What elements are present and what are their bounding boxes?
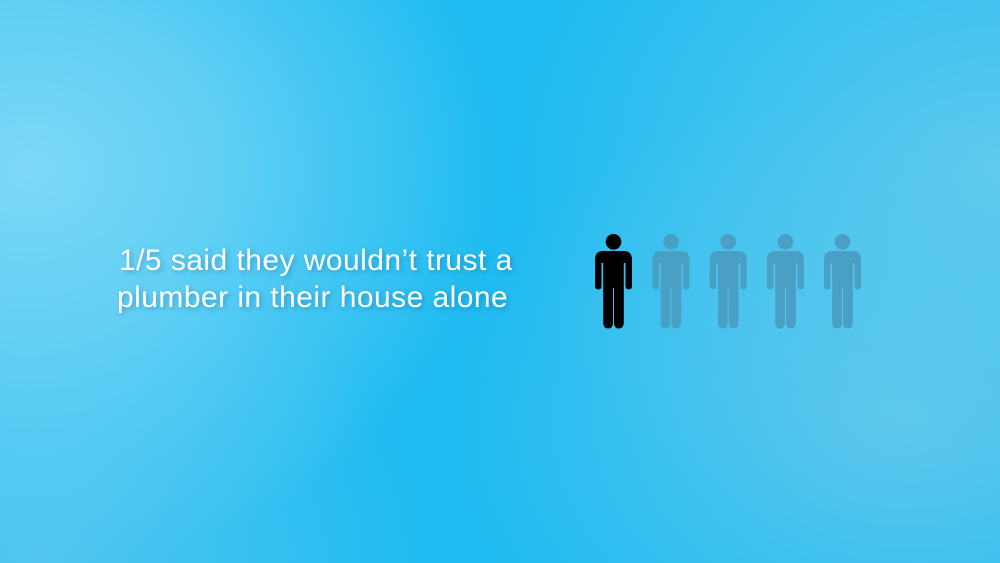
text block: survey statistic bbox=[117, 244, 514, 316]
icon: muted person 5 bbox=[824, 234, 861, 328]
icon: highlighted person bbox=[595, 234, 632, 328]
text block: survey statistic: plumber in their house alone bbox=[117, 281, 508, 314]
text block: survey statistic: 1/5 said they wouldn’t trust a bbox=[119, 244, 513, 277]
icon: muted person 4 bbox=[767, 234, 804, 328]
icon: muted person 2 bbox=[652, 234, 690, 328]
icon: muted person 3 bbox=[710, 234, 747, 328]
